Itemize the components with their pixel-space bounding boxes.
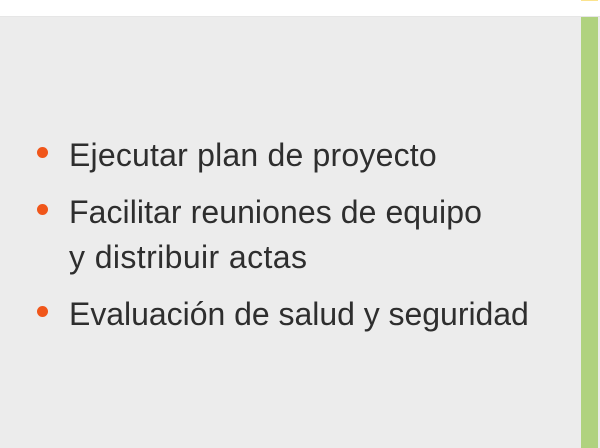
bullet 1 — [37, 147, 48, 158]
top white band — [0, 0, 600, 17]
yellow tab — [581, 0, 598, 1]
item: Facilitar reuniones de equipo y distribuir actas: y distribuir actas — [69, 239, 307, 275]
bullet 2 — [37, 204, 48, 215]
bullet 3 — [37, 306, 48, 317]
item: Evaluación de salud y seguridad: Evaluación de salud y seguridad — [69, 296, 529, 332]
bullet list — [37, 137, 529, 332]
green side bar — [581, 17, 598, 448]
item: Facilitar reuniones de equipo y distribuir actas: Facilitar reuniones de equipo — [69, 194, 482, 230]
item: Ejecutar plan de proyecto: Ejecutar plan de proyecto — [69, 137, 437, 173]
item: Facilitar reuniones de equipo y distribuir actas — [69, 194, 482, 275]
